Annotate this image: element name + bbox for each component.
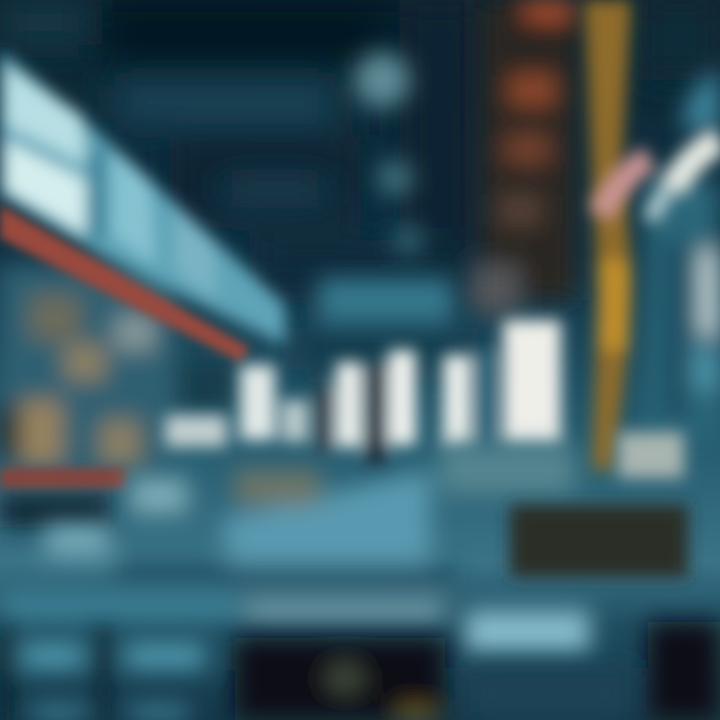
yellow column bbox=[584, 0, 634, 470]
ceiling structure bbox=[0, 0, 720, 370]
bottom dark objects bbox=[0, 622, 720, 720]
left red shelf beam bbox=[0, 205, 250, 488]
right side machine bbox=[645, 70, 720, 440]
central blue sign bbox=[318, 278, 453, 324]
orange shelving at top bbox=[470, 0, 575, 315]
floor bbox=[0, 445, 590, 652]
ceiling lights bbox=[354, 52, 423, 255]
bright white columns bbox=[165, 320, 684, 478]
dark crate panel bbox=[510, 505, 688, 577]
left pale blue shelves bbox=[0, 50, 285, 345]
left lower shelf goods bbox=[0, 265, 235, 527]
white pink arc bbox=[600, 140, 720, 220]
